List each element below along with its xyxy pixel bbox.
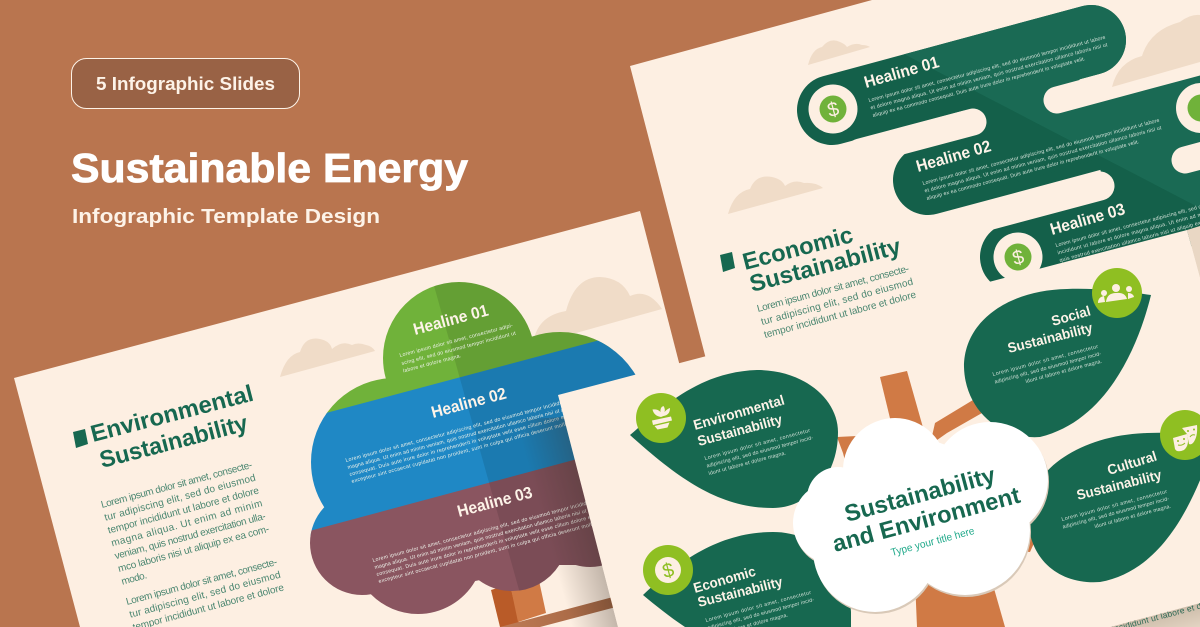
- leaf: social: [964, 268, 1151, 437]
- slide edge shadows: [514, 226, 1200, 627]
- text: row 3: [1048, 193, 1200, 264]
- badge: 5 Infographic Slides: [72, 58, 300, 108]
- text: Healine 01: scing elit, sed do eiusmod tempor incididunt ut: [401, 330, 517, 367]
- icon: mid cloud: [728, 176, 823, 214]
- leaf: environmental: [630, 370, 838, 508]
- text: Healine 02: excepteur sint occaecat cupidatat non proident, sunt in culpa qui officia deserunt mollit anim id est laborum.: [351, 407, 621, 485]
- icon: dollar row 1: $: [825, 98, 841, 122]
- text: environmental: [691, 392, 814, 477]
- text block: environmental description: Lorem ipsum dolor sit amet, consecte-: [125, 557, 278, 608]
- text: social: Social: [1049, 302, 1092, 329]
- heading: Environmental Sustainability: Environmental: [88, 380, 256, 447]
- icon: left cloud: [280, 339, 375, 377]
- text: row 1: aliquip ex ea commodo consequat. Duis aute irure dolor in reprehenderit in voluptate velit.: [872, 56, 1086, 119]
- text: Healine 02: Lorem ipsum dolor sit amet, consectetur adipiscing elit, sed do eiusmod tempor incididunt ut labore et dolore: [345, 386, 615, 464]
- icon: small cloud top: [808, 40, 870, 65]
- text block: environmental description: tempor incididunt ut labore et dolore: [107, 485, 261, 536]
- text: economic: Sustainability: [696, 573, 784, 610]
- text: cultural: Lorem ipsum dolor sit amet, consectetur: [1061, 489, 1168, 523]
- icon: dollar row 3: [994, 232, 1042, 282]
- center cloud: [793, 418, 1049, 614]
- panel: economic slide: [630, 0, 1200, 627]
- heading: Economic Sustainability: Economic: [740, 221, 856, 275]
- text: economic: Economic: [691, 563, 758, 596]
- text block: environmental description: modo.: [120, 570, 148, 588]
- leaf: cultural: [1028, 410, 1200, 582]
- text: cultural: idunt ut labore et dolore magna.: [1094, 504, 1172, 530]
- icon: plant pot: [636, 393, 686, 443]
- panel: environmental slide: [14, 211, 747, 627]
- leaf: economic: [643, 532, 851, 627]
- text: environmental: idunt ut labore et dolore magna.: [708, 450, 787, 477]
- heading: Environmental Sustainability: Sustainability: [97, 410, 250, 473]
- text block: economic description: [756, 264, 918, 341]
- text: center title: Type your title here: [890, 525, 976, 559]
- text: environmental: adipiscing elit, sed do eiusmod tempor incid-: [706, 435, 814, 469]
- text: social: Sustainability: [1006, 319, 1094, 356]
- text block: economic description: tur adipiscing elit, sed do eiusmod: [760, 277, 914, 328]
- icon: dollar: $: [660, 559, 676, 583]
- text: row 1: Healine 01: [862, 53, 941, 92]
- icon: theatre masks: [1160, 410, 1200, 460]
- heading: Economic Sustainability: Sustainability: [747, 233, 903, 297]
- text: row 2: Lorem ipsum dolor sit amet, consectetur adipiscing elit, sed do eiusmod tempor incididunt ut labore: [922, 118, 1160, 187]
- tree canopy: [310, 282, 636, 614]
- text: center title: Sustainability: [842, 462, 998, 527]
- text block: environmental description: veniam, quis nostrud exercitation ulla-: [114, 511, 267, 562]
- text block: economic description: Lorem ipsum dolor sit amet, consecte-: [756, 264, 910, 315]
- text: cultural: [1061, 448, 1172, 530]
- icon: people: [1092, 268, 1142, 318]
- text block: environmental description: Lorem ipsum dolor sit amet, consecte-: [100, 460, 253, 511]
- icon: dollar row 2: [1176, 83, 1200, 133]
- icon: title marker: [73, 429, 88, 448]
- text: social: adipiscing elit, sed do eiusmod tempor incid-: [994, 351, 1102, 385]
- text block: economic description: tempor incididunt ut labore et dolore: [763, 290, 918, 341]
- text: cultural: adipiscing elit, sed do eiusmod tempor incid-: [1062, 496, 1170, 530]
- text block: environmental description: magna aliqua. Ut enim ad minim: [110, 498, 264, 549]
- text block: environmental description: tur adipiscing elit, sed do eiusmod: [103, 473, 257, 524]
- badge: 5 Infographic Slides: 5 Infographic Slides: [96, 73, 275, 94]
- text: Healine 03: Lorem ipsum dolor sit amet, consectetur adipiscing elit, sed do eiusmod tempor incididunt ut labore et dolore: [372, 486, 642, 564]
- text: cultural: Sustainability: [1075, 466, 1163, 503]
- text: Healine 03: consequat. Duis aute irure dolor in reprehenderit in voluptate velit esse cillum dolore eu fugiat nulla pariatur.: [376, 500, 646, 578]
- heading: Environmental Sustainability: [88, 380, 256, 473]
- text: environmental: Environmental: [691, 392, 786, 433]
- text: Healine 01: Healine 01: [411, 302, 490, 339]
- text block: environmental description: [100, 460, 286, 627]
- icon: dollar row 1: [808, 84, 858, 134]
- text: Healine 01: [399, 302, 517, 374]
- text: Healine 01: labore et dolore magna.: [402, 353, 462, 374]
- text: Healine 01: Lorem ipsum dolor sit amet, consectetur adipi-: [399, 323, 514, 359]
- text: Healine 02: consequat. Duis aute irure dolor in reprehenderit in voluptate velit esse cillum dolore eu fugiat nulla pariatur.: [349, 400, 619, 478]
- process rows: [832, 40, 1200, 257]
- tree trunk: [491, 576, 616, 627]
- icon: big cloud right: [1112, 15, 1200, 87]
- text: row 1: et dolore magna aliqua. Ut enim ad minim veniam, quis nostrud exercitation ullamco laboris nisi ut: [870, 42, 1109, 111]
- icon: dollar row 3: $: [1010, 246, 1026, 270]
- text: row 2: et dolore magna aliqua. Ut enim ad minim veniam, quis nostrud exercitation ullamco laboris nisi ut: [924, 125, 1163, 194]
- text: row 2: aliquip ex ea commodo consequat. Duis aute irure dolor in reprehenderit in voluptate velit.: [926, 139, 1140, 202]
- tree trunk and branches: [837, 371, 1040, 627]
- subtitle: Infographic Template Design: [72, 205, 380, 228]
- text: Healine 03: excepteur sint occaecat cupidatat non proident, sunt in culpa qui officia deserunt mollit anim id est laborum.: [378, 507, 648, 585]
- text: environmental: Lorem ipsum dolor sit amet, consectetur: [704, 428, 811, 462]
- text block: environmental description: tur adipiscing elit, sed do eiusmod: [128, 570, 282, 621]
- icon: dollar: [643, 545, 693, 595]
- icon: right cloud: [533, 277, 662, 345]
- text: environmental: Sustainability: [696, 411, 784, 449]
- text: Healine 03: Healine 03: [455, 484, 534, 521]
- text: economic: [691, 563, 815, 627]
- text: social: idunt ut labore et dolore magna.: [1025, 359, 1103, 385]
- text: row 3: Healine 03: [1048, 200, 1127, 239]
- text block: environmental description: mco laboris nisi ut aliquip ex ea com-: [117, 524, 270, 575]
- text: Healine 02: magna aliqua. Ut enim ad minim veniam, quis nostrud exercitation ullamco laboris nisi ut aliquip ex ea commodo: [347, 393, 617, 471]
- text: social: Lorem ipsum dolor sit amet, consectetur: [992, 344, 1099, 378]
- text: cultural: Cultural: [1105, 448, 1159, 478]
- panel: sustainability and environment slide: [558, 230, 1200, 627]
- text: row 2: Healine 02: [914, 137, 993, 176]
- text: row 1: Lorem ipsum dolor sit amet, consectetur adipiscing elit, sed do eiusmod tempor incididunt ut labore: [868, 35, 1106, 104]
- title: Sustainable Energy: [71, 145, 468, 191]
- text: Healine 02: Healine 02: [429, 385, 508, 422]
- text: social: [992, 302, 1103, 385]
- text: center title: and Environment: [830, 482, 1023, 557]
- text: Healine 03: magna aliqua. Ut enim ad minim veniam, quis nostrud exercitation ullamco laboris nisi ut aliquip ex ea commodo: [374, 493, 644, 571]
- icon: title marker: [720, 252, 735, 272]
- text: economic: Lorem ipsum dolor sit amet, consectetur: [705, 590, 812, 624]
